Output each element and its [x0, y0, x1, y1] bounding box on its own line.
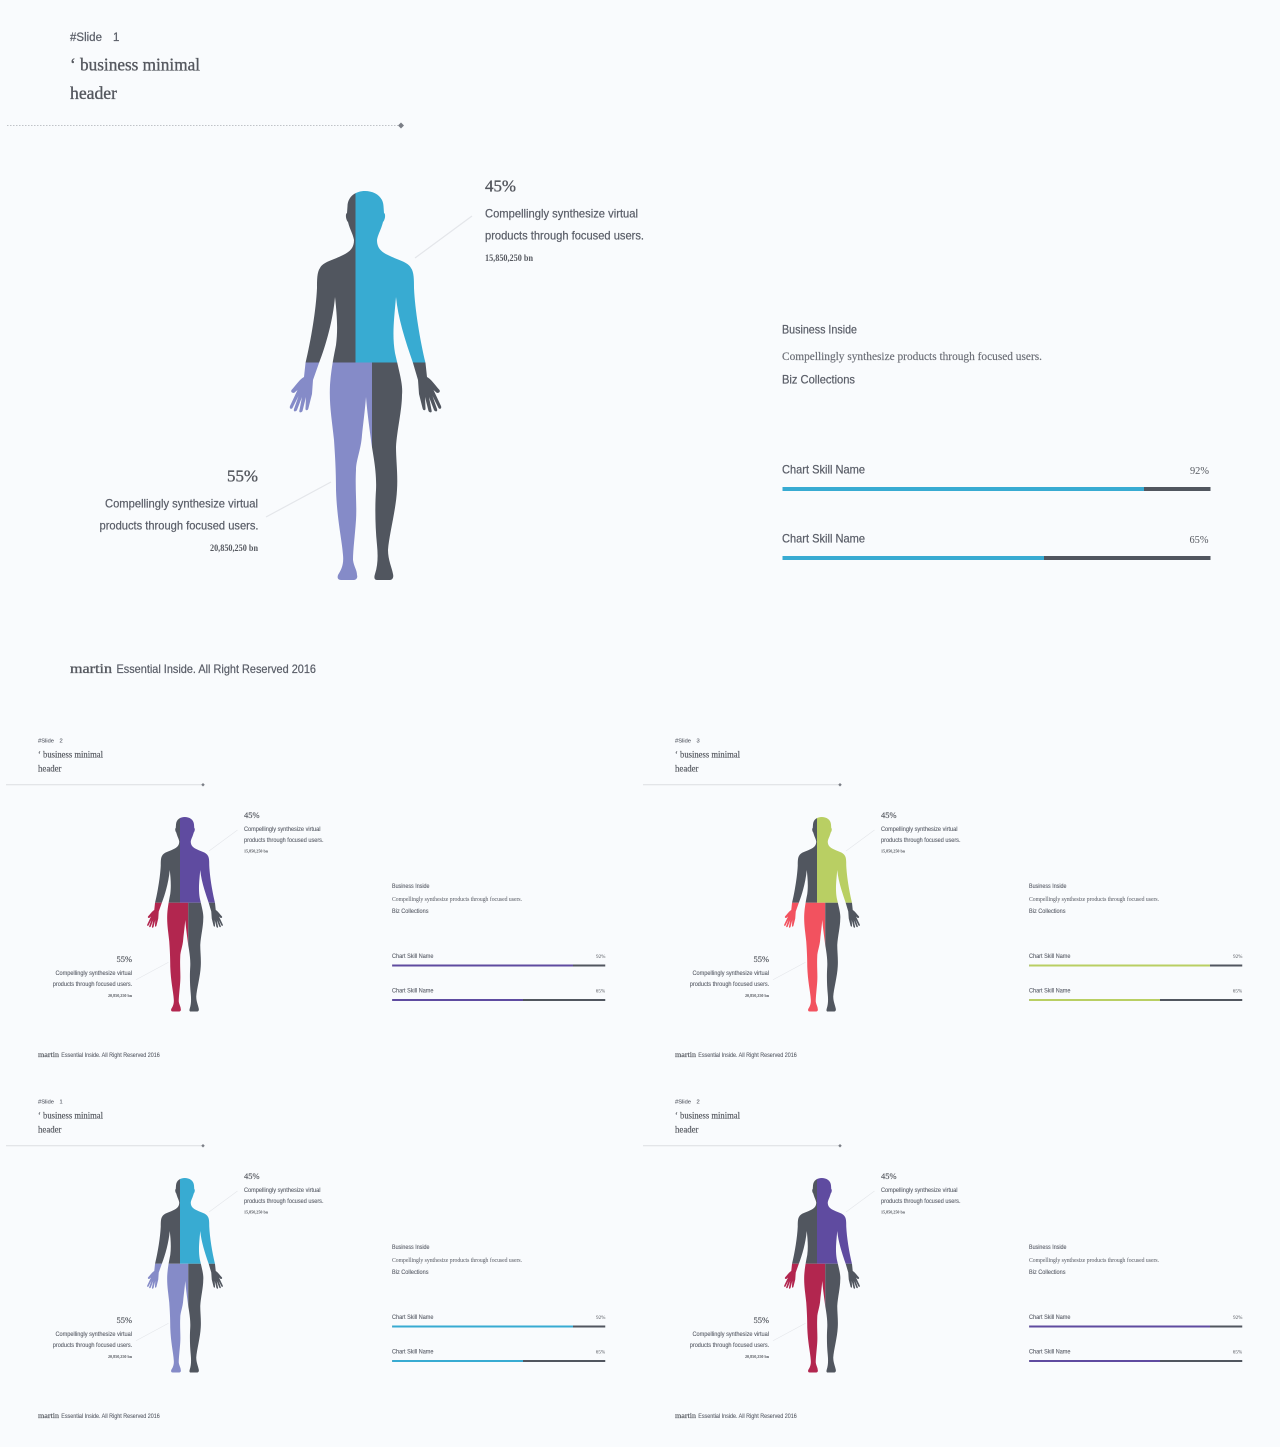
heading	[675, 749, 740, 774]
heading: header	[675, 1124, 698, 1134]
footer: Essential Inside. All Right Reserved 2016	[698, 1053, 797, 1059]
bar chart: skills: 92%	[596, 1315, 606, 1321]
text block: business inside: Compellingly synthesize products through focused users.	[392, 896, 522, 903]
callout: 45%: Compellingly synthesize virtual	[881, 827, 958, 833]
bar chart: skills: Chart Skill Name	[1029, 1315, 1071, 1321]
bar chart: skills: 65%	[1233, 988, 1243, 994]
slide number: 1	[60, 1100, 63, 1106]
footer: Essential Inside. All Right Reserved 2016	[61, 1414, 160, 1420]
callout: 55%: Compellingly synthesize virtual	[105, 496, 258, 510]
heading: header	[38, 1124, 62, 1134]
heading: ‘ business minimal	[675, 1110, 740, 1120]
panel: slide 1 (large)	[7, 32, 1210, 677]
footer: martin	[38, 1412, 60, 1420]
footer: martin	[675, 1412, 697, 1420]
text block: business inside: Compellingly synthesize products through focused users.	[392, 1257, 522, 1264]
slide number: 3	[696, 738, 700, 744]
heading	[70, 54, 200, 103]
footer: martin	[38, 1051, 60, 1059]
bar chart: skills: 92%	[1233, 1315, 1243, 1321]
slide number: #Slide	[38, 1100, 54, 1106]
panel: slide 2 (purple and crimson)	[6, 738, 606, 1059]
callout: 45%	[846, 810, 961, 854]
text block: business inside: Business Inside	[392, 1245, 430, 1251]
callout: 55%	[690, 954, 806, 998]
footer: Essential Inside. All Right Reserved 2016	[61, 1053, 160, 1059]
footer	[675, 1412, 797, 1420]
text block: business inside: Compellingly synthesize products through focused users.	[782, 349, 1042, 363]
human figure	[784, 817, 860, 1012]
bar chart: skills: Chart Skill Name	[392, 1349, 434, 1355]
slide number: #Slide	[675, 1100, 691, 1106]
footer	[38, 1051, 160, 1059]
callout: 55%: 55%	[116, 954, 132, 964]
callout: 55%: products through focused users.	[100, 518, 258, 532]
callout: 55%: products through focused users.	[690, 982, 770, 988]
text block: business inside: Business Inside	[1029, 884, 1067, 890]
callout: 45%	[209, 1171, 324, 1214]
callout: 45%	[846, 1171, 961, 1214]
heading	[38, 749, 103, 774]
callout: 55%: 20,850,250 bn	[745, 993, 769, 998]
text block: business inside: Compellingly synthesize products through focused users.	[1029, 1257, 1159, 1264]
callout: 55%: products through focused users.	[690, 1343, 770, 1349]
bar chart: skills: Chart Skill Name	[392, 1315, 434, 1321]
text block: business inside: Biz Collections	[1029, 1270, 1066, 1276]
slide number: #Slide	[38, 738, 54, 744]
callout: 45%: Compellingly synthesize virtual	[244, 1188, 320, 1194]
callout: 45%: Compellingly synthesize virtual	[485, 206, 638, 220]
callout: 55%: products through focused users.	[53, 982, 133, 988]
callout: 55%: 20,850,250 bn	[745, 1354, 769, 1359]
callout: 45%: 45%	[881, 1171, 896, 1181]
panel: slide 1 small (blue and periwinkle)	[6, 1100, 606, 1420]
callout: 55%: Compellingly synthesize virtual	[692, 971, 769, 977]
callout: 55%	[690, 1315, 806, 1359]
callout: 45%: products through focused users.	[244, 1199, 324, 1205]
callout: 55%: 55%	[754, 1315, 769, 1325]
callout: 45%: 15,850,250 bn	[485, 253, 533, 263]
bar chart: skills: 92%	[596, 954, 606, 960]
header divider with diamond	[6, 1144, 205, 1148]
text block: business inside: Compellingly synthesize products through focused users.	[1029, 896, 1159, 903]
callout: 55%: Compellingly synthesize virtual	[56, 1332, 132, 1338]
bar chart: skills: Chart Skill Name	[782, 532, 865, 546]
callout: 45%: Compellingly synthesize virtual	[244, 827, 320, 833]
callout: 45%	[415, 176, 644, 263]
callout: 55%: 20,850,250 bn	[108, 993, 132, 998]
footer: martin	[70, 662, 112, 677]
bar chart: skills	[1029, 1315, 1243, 1362]
bar chart: skills	[1029, 954, 1243, 1001]
callout: 45%	[209, 810, 324, 854]
header divider with diamond	[643, 783, 842, 786]
slide number: #Slide	[675, 738, 691, 744]
heading: ‘ business minimal	[38, 749, 103, 759]
text block: business inside: Business Inside	[1029, 1245, 1067, 1251]
text block: business inside	[392, 884, 522, 915]
callout: 45%: 45%	[244, 1171, 260, 1181]
callout: 55%	[53, 1315, 168, 1359]
callout: 45%: 45%	[485, 176, 516, 196]
callout: 55%: products through focused users.	[53, 1343, 133, 1349]
callout: 55%: 20,850,250 bn	[210, 543, 258, 553]
human figure	[147, 817, 223, 1012]
heading: header	[70, 83, 117, 103]
callout: 45%: 15,850,250 bn	[881, 848, 905, 854]
text block: business inside: Biz Collections	[1029, 909, 1066, 915]
footer	[675, 1051, 797, 1059]
footer: Essential Inside. All Right Reserved 2016	[698, 1414, 797, 1420]
text block: business inside: Biz Collections	[782, 372, 855, 386]
callout: 45%: 45%	[244, 810, 260, 820]
text block: business inside: Business Inside	[782, 322, 857, 336]
panel: slide 2 small (purple and crimson)	[643, 1100, 1243, 1420]
callout: 55%: 55%	[227, 466, 258, 486]
human figure	[290, 191, 442, 580]
callout: 45%: 15,850,250 bn	[881, 1210, 905, 1214]
callout: 45%: products through focused users.	[244, 838, 324, 844]
bar chart: skills	[392, 954, 606, 1001]
heading: header	[675, 764, 698, 774]
callout: 55%: Compellingly synthesize virtual	[692, 1332, 769, 1338]
text block: business inside	[1029, 884, 1159, 915]
bar chart: skills: 92%	[1233, 954, 1243, 960]
callout: 55%: 55%	[754, 954, 769, 964]
footer: Essential Inside. All Right Reserved 2016	[116, 662, 316, 676]
heading	[675, 1110, 740, 1134]
header divider with diamond	[643, 1144, 842, 1148]
slide number: 2	[696, 1100, 700, 1106]
text block: business inside: Biz Collections	[392, 1270, 428, 1276]
bar chart: skills: 92%	[1190, 465, 1209, 477]
header divider with diamond	[6, 783, 205, 786]
bar chart: skills: 65%	[1190, 534, 1208, 546]
bar chart: skills: 65%	[596, 988, 606, 994]
callout: 45%: 15,850,250 bn	[244, 848, 268, 854]
callout: 45%: products through focused users.	[485, 228, 644, 242]
bar chart: skills: Chart Skill Name	[782, 462, 865, 476]
callout: 45%: 45%	[881, 810, 896, 820]
header divider with diamond	[7, 122, 404, 128]
callout: 45%: Compellingly synthesize virtual	[881, 1188, 958, 1194]
bar chart: skills: Chart Skill Name	[392, 988, 434, 994]
slide number: #Slide	[70, 32, 102, 44]
text block: business inside: Biz Collections	[392, 909, 428, 915]
callout: 55%: Compellingly synthesize virtual	[56, 971, 132, 977]
bar chart: skills: Chart Skill Name	[1029, 988, 1071, 994]
callout: 45%: products through focused users.	[881, 1199, 961, 1205]
callout: 55%: 20,850,250 bn	[108, 1354, 132, 1359]
heading: ‘ business minimal	[70, 54, 200, 74]
callout: 55%	[53, 954, 168, 998]
callout: 55%: 55%	[116, 1315, 132, 1325]
bar chart: skills: Chart Skill Name	[392, 954, 434, 960]
bar chart: skills	[782, 462, 1210, 560]
callout: 45%: 15,850,250 bn	[244, 1210, 268, 1214]
heading: header	[38, 764, 62, 774]
bar chart: skills: Chart Skill Name	[1029, 1349, 1071, 1355]
human figure	[784, 1178, 860, 1372]
bar chart: skills: 65%	[596, 1350, 606, 1356]
heading	[38, 1110, 103, 1134]
text block: business inside	[782, 322, 1042, 386]
heading: ‘ business minimal	[38, 1110, 103, 1120]
heading: ‘ business minimal	[675, 749, 740, 759]
bar chart: skills: 65%	[1233, 1350, 1243, 1356]
bar chart: skills: Chart Skill Name	[1029, 954, 1071, 960]
footer	[38, 1412, 160, 1420]
panel: slide 3 (green and coral)	[643, 738, 1243, 1059]
bar chart: skills	[392, 1315, 606, 1362]
human figure	[147, 1178, 223, 1372]
slide number: 2	[60, 738, 63, 744]
text block: business inside	[1029, 1245, 1159, 1276]
slide number: 1	[113, 32, 119, 44]
text block: business inside: Business Inside	[392, 884, 430, 890]
text block: business inside	[392, 1245, 522, 1276]
callout: 55%	[100, 466, 331, 553]
footer: martin	[675, 1051, 697, 1059]
callout: 45%: products through focused users.	[881, 838, 961, 844]
